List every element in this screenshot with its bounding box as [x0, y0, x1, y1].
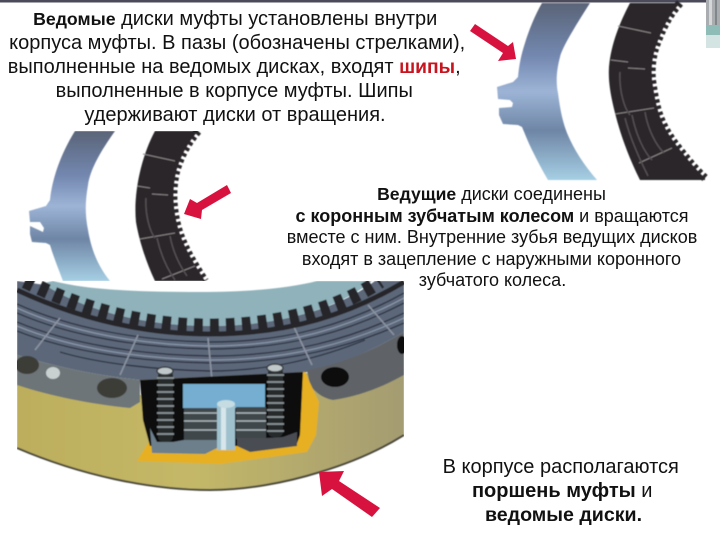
photo: clutch housing — [15, 281, 407, 490]
spring right — [267, 364, 284, 437]
text block: housing: поршень муфты и — [472, 480, 652, 502]
centre pin — [217, 400, 235, 450]
text block: driving discs: зубчатого колеса. — [419, 270, 566, 290]
text block: driving discs: входят в зацепление с наружными коронного — [302, 249, 681, 269]
arrow: top right — [470, 24, 516, 61]
stacked plates right — [236, 407, 266, 439]
right flange — [307, 332, 404, 400]
text block: driving discs: с коронным зубчатым колесом и вращаются — [295, 206, 689, 226]
gear teeth — [17, 281, 404, 334]
driven disc with tab — [29, 131, 115, 281]
flange — [17, 355, 140, 408]
text block: driving discs: вместе с ним. Внутренние зубья ведущих дисков — [287, 227, 697, 247]
housing body — [17, 360, 404, 490]
text block: driven discs: удерживают диски от вращения. — [84, 104, 386, 126]
yellow frame — [137, 372, 319, 464]
text block: housing: ведомые диски. — [485, 504, 642, 526]
text block: driving discs: Ведущие диски соединены — [377, 184, 606, 204]
holes — [15, 336, 407, 398]
blue ring — [40, 281, 372, 326]
driving disc with teeth — [135, 131, 205, 281]
grooved friction disc — [17, 281, 404, 382]
base plate right — [237, 432, 297, 452]
blue plate — [183, 384, 265, 408]
photo: driven and driving discs, middle left — [29, 131, 205, 281]
arrow: middle — [184, 185, 231, 219]
text block: driven discs: выполненные на ведомых дисках, входят шипы, — [8, 56, 461, 78]
text block: driven discs: Ведомые диски муфты установлены внутри — [33, 8, 437, 30]
black notch — [140, 372, 303, 446]
base plate left — [150, 428, 217, 454]
housing lower edge — [17, 435, 404, 490]
text block: housing: В корпусе располагаются — [443, 456, 679, 478]
arrow: bottom — [319, 471, 380, 517]
photo: driven and driving discs, top right — [497, 3, 705, 180]
corner decoration — [706, 0, 720, 48]
driving disc with teeth — [609, 3, 705, 180]
text block: driven discs: выполненные в корпусе муфты. Шипы — [56, 80, 413, 102]
driven disc with tab — [497, 3, 597, 180]
stacked plates left — [184, 408, 218, 441]
top bar — [0, 0, 706, 2]
spring left — [157, 367, 174, 442]
text block: driven discs: корпуса муфты. В пазы (обозначены стрелками), — [9, 32, 465, 54]
